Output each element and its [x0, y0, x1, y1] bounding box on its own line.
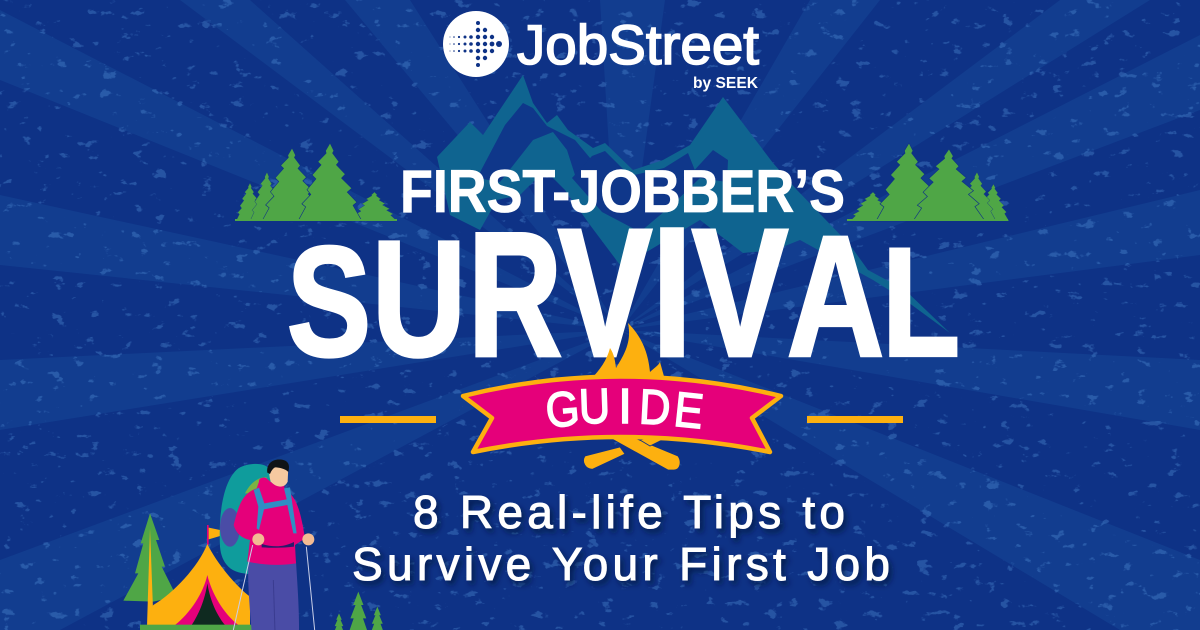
heading: First-Jobber's: FIRST-JOBBER’S	[400, 158, 845, 225]
banner label: Guide: U	[578, 378, 611, 434]
banner label: Guide	[543, 378, 706, 439]
mountains	[437, 75, 950, 333]
divider: right	[807, 416, 903, 423]
hiker	[220, 459, 315, 630]
banner ribbon	[463, 376, 781, 452]
hands	[252, 533, 264, 545]
trekking poles	[233, 545, 315, 630]
banner label: Guide: E	[672, 381, 706, 439]
banner label: Guide: G	[543, 380, 582, 438]
icon: JobStreet dotted arrow	[443, 11, 509, 77]
subtitle: Survive Your First Job	[352, 538, 890, 590]
straps and belt	[254, 487, 297, 533]
banner label: Guide: I	[618, 380, 632, 434]
icon: tent	[150, 525, 250, 625]
subtitle	[352, 486, 890, 590]
heading: Survival: I	[652, 191, 692, 395]
icon: campfire flame	[590, 323, 665, 380]
heading: Survival: U	[372, 207, 466, 391]
backpack	[220, 464, 277, 574]
heading: Survival: L	[882, 217, 960, 389]
heading: Survival	[287, 191, 960, 395]
icon: pine tree	[123, 513, 177, 627]
wordmark: JobStreet	[517, 13, 759, 76]
heading: Survival: V	[558, 192, 652, 395]
head	[269, 467, 288, 487]
ground	[140, 625, 275, 630]
heading: Survival: V	[692, 192, 788, 395]
trousers	[248, 562, 299, 630]
jacket	[234, 478, 305, 565]
icon: campfire logs	[584, 430, 680, 470]
heading: Survival: S	[287, 214, 371, 389]
banner label: Guide: D	[638, 379, 672, 435]
illustration: camp and hiker	[123, 459, 384, 630]
by SEEK: by SEEK	[693, 75, 759, 92]
heading: Survival: R	[468, 195, 562, 393]
small pine trees	[334, 592, 384, 630]
subtitle: 8 Real-life Tips to	[413, 486, 845, 538]
logo: JobStreet by SEEK	[443, 11, 759, 92]
divider: left	[340, 416, 436, 423]
trees: left cluster	[235, 143, 397, 221]
trees: right cluster	[847, 143, 1009, 221]
heading: Survival: A	[787, 201, 884, 393]
